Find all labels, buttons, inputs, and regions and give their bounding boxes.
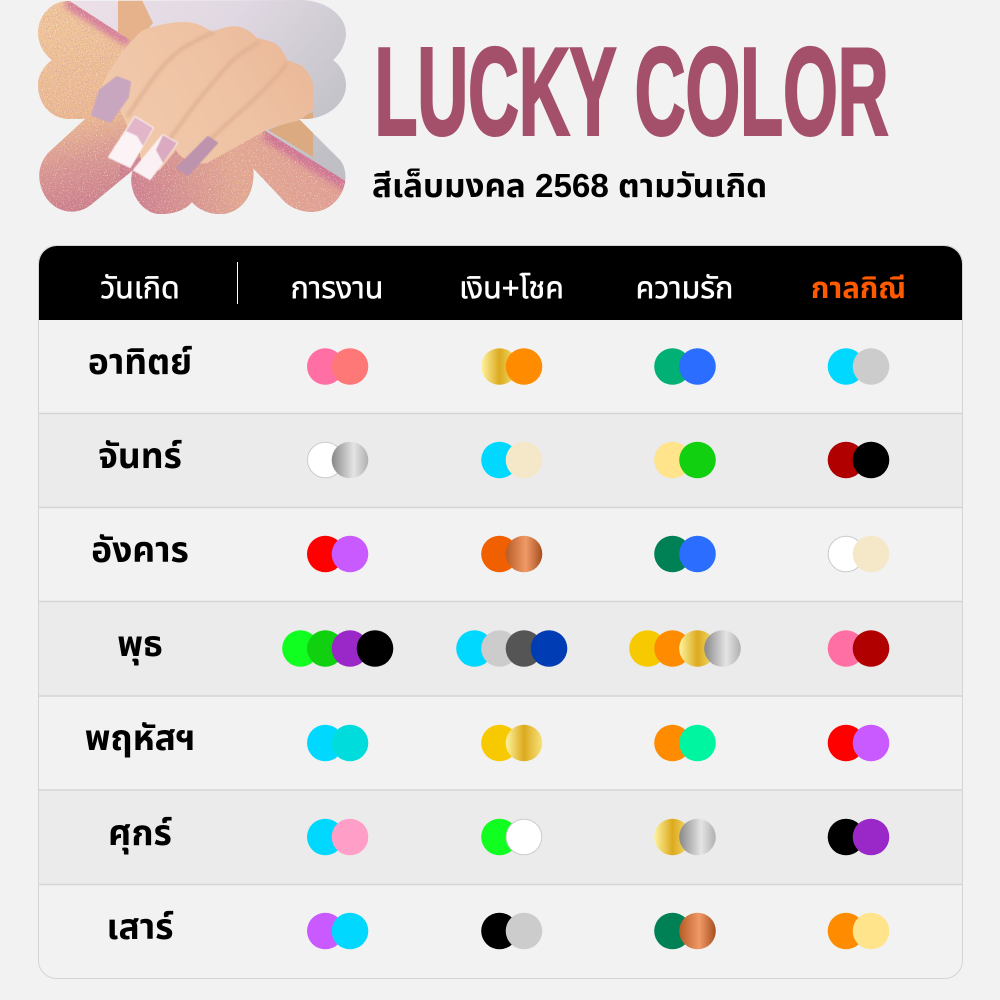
row: Tuesday bbox=[91, 530, 889, 572]
table header: การงาน bbox=[291, 271, 383, 305]
row: Saturday bbox=[107, 907, 889, 949]
row: Saturday: เสาร์ bbox=[107, 907, 174, 947]
hand bbox=[100, 22, 313, 170]
row: Thursday bbox=[85, 718, 889, 761]
row: Monday: จันทร์ bbox=[98, 436, 182, 476]
table header: ความรัก bbox=[636, 271, 733, 305]
row: Tuesday: อังคาร bbox=[91, 530, 189, 570]
table header: กาลกิณี bbox=[811, 272, 906, 305]
row: Wednesday bbox=[117, 624, 889, 667]
row: Sunday bbox=[88, 342, 889, 385]
table header bbox=[100, 262, 906, 305]
row: Wednesday: พุธ bbox=[117, 624, 163, 665]
table header: เงิน+โชค bbox=[459, 271, 564, 305]
subtitle: สีเล็บมงคล 2568 ตามวันเกิด bbox=[372, 168, 767, 205]
table header: วันเกิด bbox=[100, 271, 180, 305]
row: Sunday: อาทิตย์ bbox=[88, 342, 192, 382]
row: Monday bbox=[98, 436, 889, 478]
row: Thursday: พฤหัสฯ bbox=[85, 718, 195, 758]
nails bbox=[92, 77, 217, 179]
photo: manicured hand on glitter bbox=[30, 0, 350, 225]
row: Friday bbox=[108, 813, 889, 855]
row: Friday: ศุกร์ bbox=[108, 813, 172, 854]
panel: lucky color table bbox=[38, 246, 962, 978]
